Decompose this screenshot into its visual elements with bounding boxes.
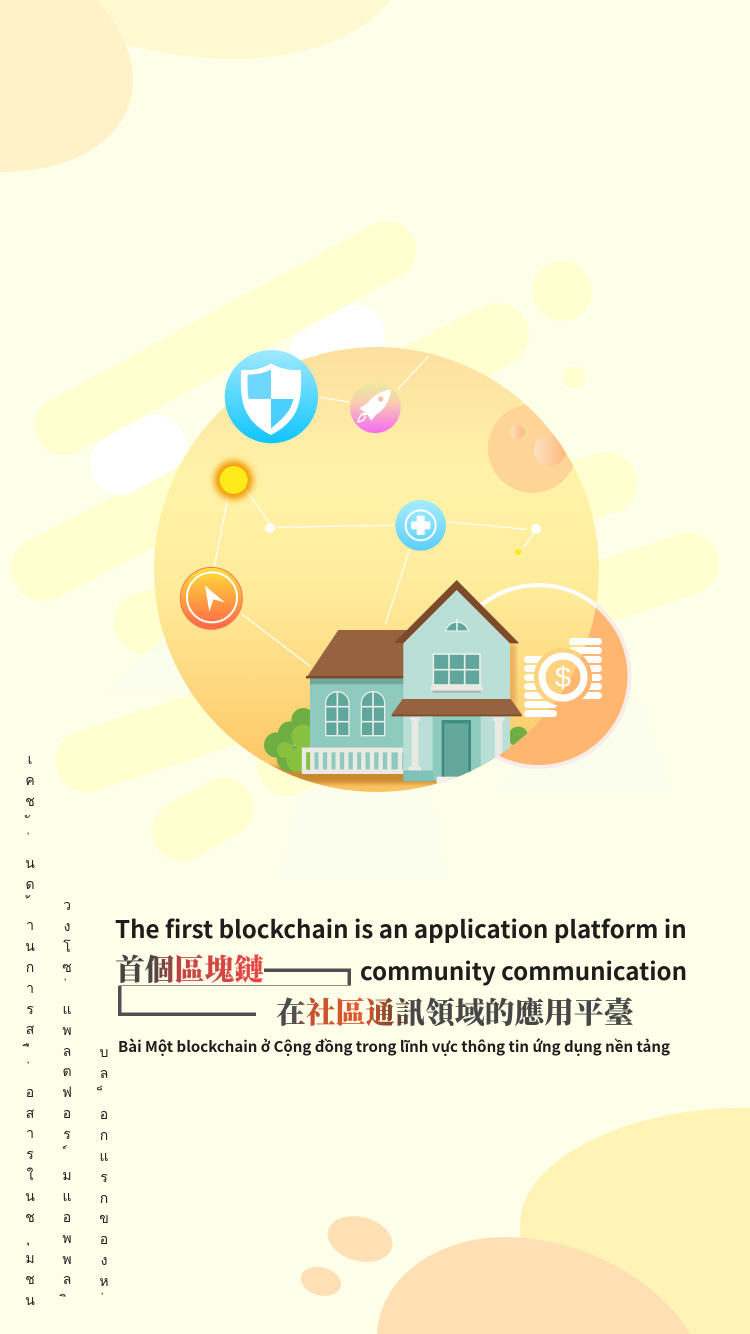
Thai vertical column 2: ว xyxy=(63,899,71,914)
bottom blobs xyxy=(297,1108,750,1334)
coins: $ xyxy=(555,662,571,694)
Thai vertical column 2: พ xyxy=(62,1253,72,1268)
Thai vertical column 3: ก xyxy=(100,1192,108,1207)
Thai vertical column 2: แ xyxy=(62,1003,72,1018)
left wing xyxy=(306,630,407,773)
Thai vertical column 1: เ xyxy=(28,753,32,768)
icon: plus xyxy=(395,500,446,551)
Thai vertical column 1: น xyxy=(25,857,35,872)
Thai vertical column 3: ง xyxy=(101,1254,107,1269)
small pale circles xyxy=(532,261,592,388)
Thai vertical column 3: บ xyxy=(100,1046,108,1061)
Thai vertical column 3: ล xyxy=(100,1067,108,1082)
Thai vertical column 1: อ xyxy=(26,1086,34,1101)
Thai vertical column 1: ส xyxy=(26,1023,34,1038)
Thai vertical column 1: า xyxy=(26,919,34,934)
Thai vertical column 3: ห xyxy=(99,1275,109,1290)
Thai vertical column 2: อ xyxy=(63,1211,71,1226)
Thai vertical column 3: แ xyxy=(99,1150,109,1165)
coin disc xyxy=(448,585,630,767)
Thai vertical column 2: แ xyxy=(62,1190,72,1205)
Thai vertical column 1: ด xyxy=(25,878,35,893)
Thai vertical column 3: อ xyxy=(100,1108,108,1123)
Thai vertical column 2: ต xyxy=(62,1065,72,1080)
main window xyxy=(431,654,483,693)
Vietnamese subtitle: Bài Một blockchain ở Cộng đồng trong lĩnh vực thông tin ứng dụng nền tảng xyxy=(118,1036,670,1057)
Thai vertical column 1: ก xyxy=(26,961,34,976)
Thai vertical column 1: ร xyxy=(26,1003,34,1018)
Thai vertical column 1: ใ xyxy=(27,1169,33,1184)
bushes xyxy=(264,708,528,772)
Thai vertical column 1: น xyxy=(25,1190,35,1205)
coin ring xyxy=(448,585,630,767)
Thai vertical column 1: น xyxy=(25,1294,35,1309)
Thai vertical column 1: า xyxy=(26,982,34,997)
diagonal stripes xyxy=(43,250,688,831)
Thai vertical column 3: อ xyxy=(100,1233,108,1248)
main circle xyxy=(154,347,599,792)
Thai vertical column 3: ก xyxy=(100,1129,108,1144)
Thai vertical column 3 xyxy=(96,1046,109,1294)
Thai vertical column 2: ม xyxy=(62,1169,72,1184)
Thai vertical column 1: ส xyxy=(26,1107,34,1122)
Thai vertical column 3: ข xyxy=(99,1212,109,1227)
arched windows xyxy=(326,692,385,736)
Thai vertical column 1: ช xyxy=(25,1211,35,1226)
network dots xyxy=(265,523,541,555)
porch xyxy=(392,699,522,783)
Chinese heading part 2: 在社區通訊領域的應用平臺 xyxy=(276,997,634,1030)
Thai vertical column 1: ร xyxy=(26,1148,34,1163)
Thai vertical column 1: น xyxy=(25,940,35,955)
icon: shield xyxy=(225,350,318,443)
wall shadow xyxy=(510,644,518,706)
railing xyxy=(302,748,403,774)
house xyxy=(260,580,528,783)
Thai vertical column 3: ร xyxy=(100,1171,108,1186)
planet xyxy=(488,404,577,493)
ground shadow xyxy=(260,767,447,783)
top blobs xyxy=(0,0,390,172)
Thai vertical column 1: ช xyxy=(25,795,35,810)
English heading line 2: community communication xyxy=(360,952,687,987)
Thai vertical column 2: ร xyxy=(63,1128,71,1143)
English heading line 1: The first blockchain is an application platform in xyxy=(115,910,687,945)
Thai vertical column 2: ล xyxy=(63,1273,71,1288)
Thai vertical column 2: พ xyxy=(62,1024,72,1039)
Thai vertical column 2: พ xyxy=(62,1232,72,1247)
icon: compass xyxy=(180,567,242,629)
Thai vertical column 1: า xyxy=(26,1127,34,1142)
Thai vertical column 2: โ xyxy=(63,941,71,956)
icon: rocket xyxy=(350,382,401,433)
Thai vertical column 2: ฟ xyxy=(62,1086,72,1101)
right wing xyxy=(394,580,519,699)
Thai vertical column 1: ค xyxy=(25,774,35,789)
Thai vertical column 1 xyxy=(22,753,35,1309)
Thai vertical column 1: ช xyxy=(25,1273,35,1288)
connector lines xyxy=(214,356,533,666)
Thai vertical column 2: ง xyxy=(64,920,70,935)
faint triangles xyxy=(105,610,670,880)
network icons xyxy=(180,350,541,666)
icon: sun xyxy=(214,461,253,499)
bracket lines xyxy=(118,968,351,1016)
Thai vertical column 2: ล xyxy=(63,1045,71,1060)
Thai vertical column 2 xyxy=(59,899,72,1297)
Thai vertical column 1: ม xyxy=(25,1252,35,1267)
coins xyxy=(524,638,602,717)
Chinese heading part 1: 首個區塊鏈 xyxy=(115,954,264,987)
Thai vertical column 2: ซ xyxy=(62,961,72,976)
Thai vertical column 2: อ xyxy=(63,1107,71,1122)
